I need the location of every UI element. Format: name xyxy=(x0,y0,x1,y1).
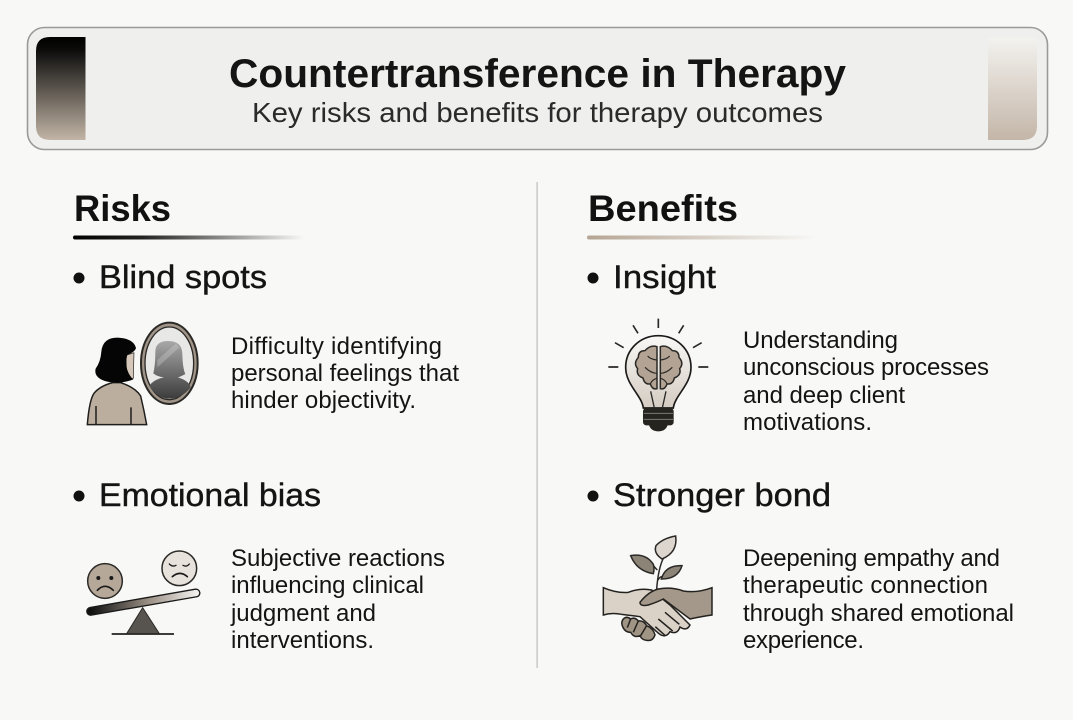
benefits underline xyxy=(587,236,817,240)
description: hinder objectivity. xyxy=(231,387,416,414)
item: stronger bond xyxy=(588,477,1014,654)
risks underline xyxy=(73,236,304,240)
bullet xyxy=(74,272,84,284)
item heading: Stronger bond xyxy=(613,477,831,513)
item: blind spots xyxy=(74,259,459,425)
item: emotional bias xyxy=(74,477,445,654)
description: experience. xyxy=(743,627,864,654)
item heading: Emotional bias xyxy=(99,477,321,513)
description: personal feelings that xyxy=(231,360,459,387)
heading: benefits: Benefits xyxy=(588,188,738,229)
panel: benefits xyxy=(587,188,1014,654)
description xyxy=(231,333,459,414)
description xyxy=(743,545,1014,654)
banner right gradient block xyxy=(988,38,1037,140)
heading: risks: Risks xyxy=(74,188,171,229)
bullet xyxy=(588,490,598,502)
title banner xyxy=(28,28,1048,150)
description: interventions. xyxy=(231,627,374,654)
description: motivations. xyxy=(743,409,872,436)
item heading: Blind spots xyxy=(99,259,267,295)
title: Countertransference in Therapy xyxy=(229,52,847,96)
description: Difficulty identifying xyxy=(231,333,442,360)
description: judgment and xyxy=(230,600,376,627)
icon: unbalanced scale with faces xyxy=(88,551,197,634)
banner left gradient block xyxy=(36,37,86,140)
subtitle: Key risks and benefits for therapy outcomes xyxy=(252,97,823,128)
icon: light bulb with brain xyxy=(608,319,708,431)
description: and deep client xyxy=(743,382,905,409)
description: Deepening empathy and xyxy=(743,545,1000,572)
description: influencing clinical xyxy=(231,572,424,599)
icon: handshake with plant xyxy=(603,536,712,641)
item heading: Insight xyxy=(613,259,716,295)
center divider xyxy=(536,182,538,668)
description: unconscious processes xyxy=(743,354,989,381)
description: Subjective reactions xyxy=(231,545,445,572)
description: therapeutic connection xyxy=(743,572,988,599)
bullet xyxy=(588,272,598,284)
icon: woman looking at mirror xyxy=(87,323,198,425)
description xyxy=(230,545,445,654)
description: Understanding xyxy=(743,327,898,354)
description xyxy=(743,327,989,436)
item: insight xyxy=(588,259,989,436)
description: through shared emotional xyxy=(743,600,1014,627)
panel: risks xyxy=(73,188,459,654)
bullet xyxy=(74,490,84,502)
